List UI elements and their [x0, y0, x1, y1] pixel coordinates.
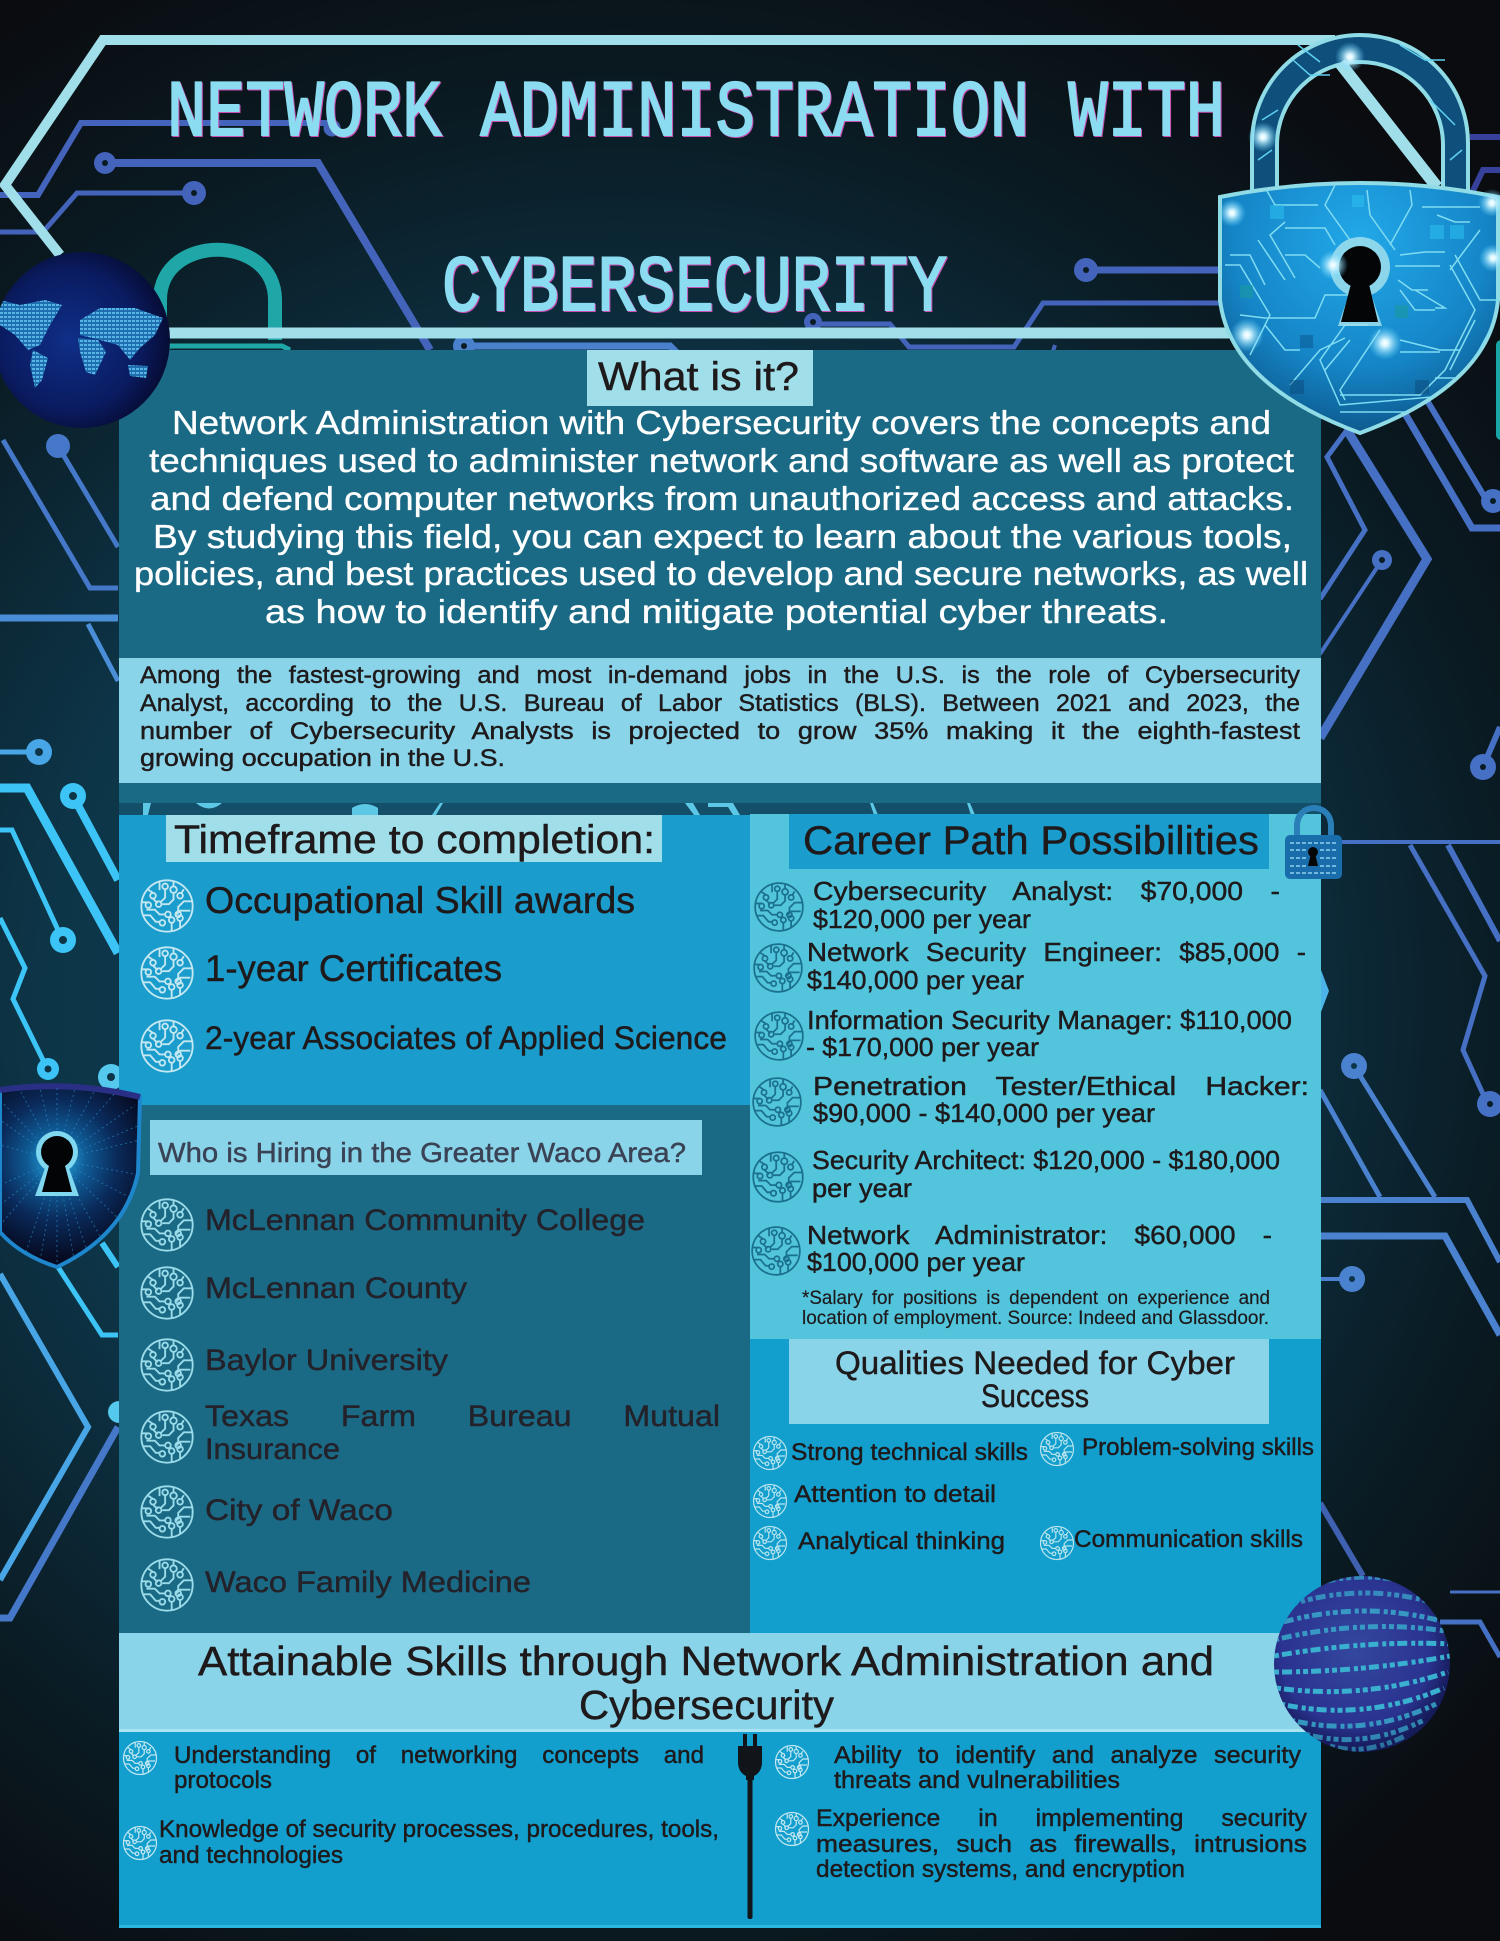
- text block: job growth: number of Cybersecurity Analysts is projected to grow 35% making it the eighth-fastest: [140, 718, 1300, 745]
- skill: networking concepts: Understanding of networking concepts and: [174, 1742, 704, 1769]
- text block: job growth: growing occupation in the U.S.: [140, 745, 505, 772]
- item: texas farm bureau: [141, 1400, 720, 1466]
- text block: description: as how to identify and mitigate potential cyber threats.: [265, 593, 1168, 630]
- skill: implementing measures: detection systems, and encryption: [816, 1856, 1185, 1883]
- heading: who is hiring: [150, 1120, 702, 1175]
- career: security architect: per year: [812, 1173, 912, 1203]
- title: CYBERSECURITY: [442, 244, 947, 335]
- title: NETWORK ADMINISTRATION WITH: [167, 69, 1225, 160]
- icon: world globe: [0, 252, 170, 428]
- padlock shackle: [1252, 35, 1468, 195]
- padlock diagonal bar: [1340, 63, 1437, 187]
- panel: career path possibilities: [750, 814, 1321, 1339]
- item: 2-year associates: 2-year Associates of Applied Science: [205, 1020, 727, 1056]
- icon: big padlock: [1218, 35, 1500, 433]
- panel: attainable skills: [119, 1633, 1321, 1928]
- career: information security manager: Information Security Manager: $110,000: [807, 1005, 1292, 1035]
- padlock data squares: [1240, 195, 1464, 394]
- quality: strong technical skills: Strong technical skills: [791, 1439, 1028, 1466]
- quality: problem-solving skills: [1040, 1432, 1314, 1466]
- padlock sparkles: [1218, 42, 1500, 360]
- teal lock arc: [160, 250, 290, 350]
- item: waco family medicine: [141, 1559, 531, 1611]
- heading: career path: Career Path Possibilities: [803, 819, 1259, 863]
- panel: timeframe to completion: [119, 815, 750, 1105]
- title frame: [5, 40, 1335, 333]
- text block: description: techniques used to administer network and software as well as protect: [149, 442, 1294, 479]
- padlock body: [1220, 183, 1498, 433]
- career: network security engineer: Network Security Engineer: $85,000 -: [807, 937, 1306, 967]
- text block: description: [134, 404, 1308, 630]
- skill: implementing measures: measures, such as firewalls, intrusions: [816, 1831, 1307, 1858]
- text block: job growth: Analyst, according to the U.S. Bureau of Labor Statistics (BLS). Between 2021 and 2023, the: [140, 690, 1300, 717]
- circuit lines: top: [0, 120, 1500, 360]
- career: penetration tester: Penetration Tester/Ethical Hacker:: [813, 1071, 1309, 1101]
- padlock keyhole: [1330, 237, 1390, 326]
- career: network security engineer: [754, 937, 1306, 995]
- item: mclennan county: McLennan County: [205, 1272, 467, 1305]
- item: baylor university: [141, 1339, 448, 1391]
- text block: job growth: [119, 658, 1321, 783]
- item: texas farm bureau: Insurance: [205, 1433, 340, 1466]
- heading: attainable skills: Attainable Skills through Network Administration and: [198, 1638, 1214, 1684]
- quality: communication skills: [1040, 1526, 1303, 1560]
- padlock circuit traces: [1225, 170, 1498, 412]
- icon: shield with keyhole: [0, 1085, 140, 1267]
- heading: what is it: [587, 350, 813, 406]
- skill: identify threats: [776, 1742, 1301, 1794]
- icon: plug: [738, 1734, 762, 1919]
- skill: identify threats: threats and vulnerabilities: [834, 1767, 1120, 1794]
- quality: communication skills: Communication skills: [1074, 1526, 1303, 1553]
- heading: qualities: Qualities Needed for Cyber: [835, 1345, 1235, 1381]
- item: baylor university: Baylor University: [205, 1344, 448, 1377]
- salary note: [802, 1288, 1270, 1329]
- text block: description: By studying this field, you can expect to learn about the various tools,: [153, 518, 1292, 555]
- quality: attention to detail: Attention to detail: [794, 1481, 996, 1508]
- item: mclennan county: [141, 1267, 467, 1319]
- quality: strong technical skills: [754, 1436, 1028, 1470]
- heading: attainable skills: [119, 1633, 1321, 1732]
- panel: who is hiring: [119, 1105, 750, 1633]
- text block: description: and defend computer networks from unauthorized access and attacks.: [150, 480, 1294, 517]
- career: network administrator: $100,000 per year: [807, 1247, 1025, 1277]
- career: cybersecurity analyst: $120,000 per year: [813, 904, 1031, 934]
- item: 2-year associates: [141, 1020, 727, 1072]
- career: penetration tester: [753, 1071, 1309, 1128]
- icon: small padlock: [1285, 808, 1342, 879]
- quality: problem-solving skills: Problem-solving skills: [1082, 1434, 1314, 1461]
- heading: who is hiring: Who is Hiring in the Greater Waco Area?: [158, 1137, 686, 1168]
- career: network administrator: [752, 1220, 1272, 1277]
- quality: analytical thinking: [754, 1526, 1005, 1560]
- career: network administrator: Network Administrator: $60,000 -: [807, 1220, 1272, 1250]
- career: cybersecurity analyst: Cybersecurity Analyst: $70,000 -: [813, 876, 1280, 906]
- skill: implementing measures: [776, 1805, 1307, 1883]
- item: 1-year certificates: 1-year Certificates: [205, 948, 502, 989]
- career: security architect: [753, 1145, 1280, 1203]
- circuit lines: left: [0, 434, 130, 1618]
- skill: implementing measures: Experience in implementing security: [816, 1805, 1307, 1832]
- text block: job growth: Among the fastest-growing and most in-demand jobs in the U.S. is the role of Cybersecurity: [140, 662, 1300, 689]
- item: city of waco: City of Waco: [205, 1494, 393, 1527]
- skill: security processes: [124, 1816, 719, 1869]
- title: [167, 69, 1225, 335]
- teal edge shape: [1496, 340, 1500, 440]
- salary note: *Salary for positions is dependent on experience and: [802, 1288, 1270, 1309]
- item: city of waco: [141, 1486, 393, 1538]
- shield data rays: [0, 1085, 140, 1265]
- padlock shackle traces: [1258, 45, 1462, 160]
- heading: qualities: [789, 1339, 1269, 1424]
- career: cybersecurity analyst: [755, 876, 1280, 934]
- item: waco family medicine: Waco Family Medicine: [205, 1566, 531, 1599]
- circuit bits in gap: [119, 803, 1321, 815]
- heading: timeframe: Timeframe to completion:: [174, 818, 655, 862]
- heading: attainable skills: Cybersecurity: [579, 1682, 835, 1728]
- circuit lines: right: [1320, 397, 1500, 1657]
- career: security architect: Security Architect: $120,000 - $180,000: [812, 1145, 1280, 1175]
- item: mclennan community college: McLennan Community College: [205, 1204, 645, 1237]
- skill: identify threats: Ability to identify and analyze security: [834, 1742, 1301, 1769]
- career: penetration tester: $90,000 - $140,000 per year: [813, 1098, 1155, 1128]
- text block: description: Network Administration with Cybersecurity covers the concepts and: [172, 404, 1271, 441]
- skill: networking concepts: [124, 1742, 704, 1794]
- skill: networking concepts: protocols: [174, 1767, 272, 1794]
- item: texas farm bureau: Texas Farm Bureau Mutual: [205, 1400, 720, 1433]
- heading: what is it: What is it?: [598, 355, 799, 399]
- skill: security processes: and technologies: [159, 1842, 343, 1869]
- panel: what is it: [119, 350, 1321, 803]
- career: network security engineer: $140,000 per year: [807, 965, 1024, 995]
- text block: description: policies, and best practices used to develop and secure networks, as well: [134, 555, 1308, 592]
- career: information security manager: - $170,000 per year: [806, 1032, 1039, 1062]
- item: mclennan community college: [141, 1199, 645, 1251]
- item: 1-year certificates: [141, 947, 502, 999]
- skill: security processes: Knowledge of security processes, procedures, tools,: [159, 1816, 719, 1843]
- heading: qualities: Success: [981, 1378, 1089, 1414]
- panel: qualities: [750, 1339, 1321, 1633]
- icon: binary globe: [1274, 1576, 1452, 1752]
- item: occupational skill awards: [141, 880, 635, 932]
- quality: analytical thinking: Analytical thinking: [798, 1528, 1005, 1555]
- quality: attention to detail: [754, 1481, 996, 1518]
- salary note: location of employment. Source: Indeed and Glassdoor.: [802, 1308, 1269, 1329]
- item: occupational skill awards: Occupational Skill awards: [205, 880, 635, 921]
- career: information security manager: [755, 1005, 1292, 1062]
